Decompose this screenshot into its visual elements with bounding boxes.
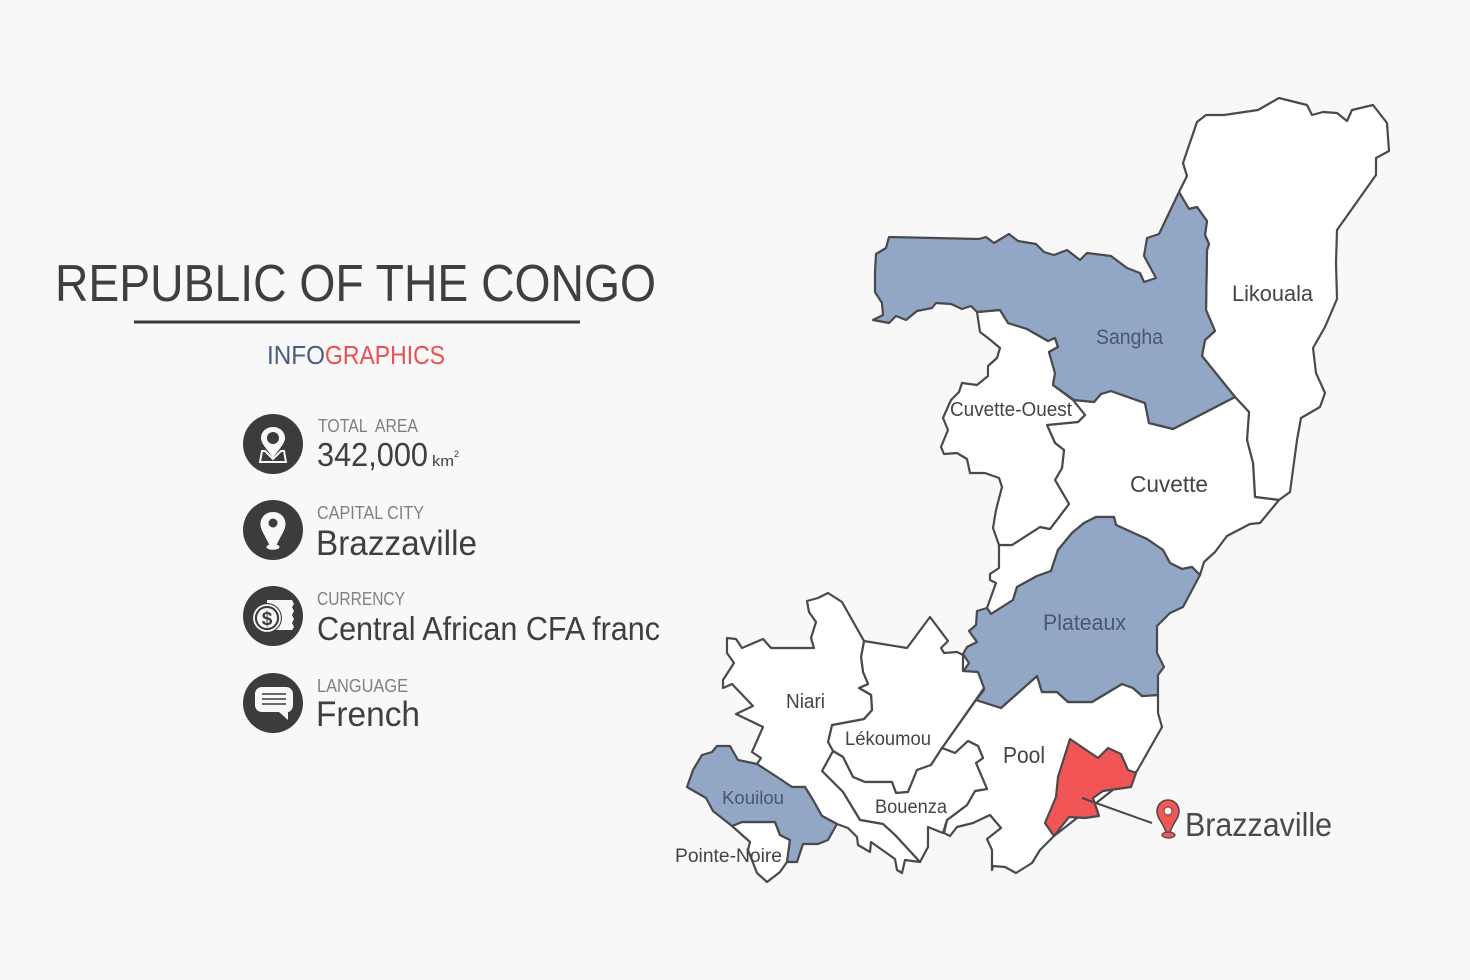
unit: square kilometres: km	[432, 453, 454, 470]
value: language: French	[316, 695, 420, 734]
label: total area: TOTAL AREA	[318, 416, 418, 436]
icon: location pin	[243, 500, 303, 560]
label: currency: CURRENCY	[317, 589, 405, 609]
facts list	[243, 414, 660, 734]
label: Bouenza: Bouenza	[875, 797, 947, 818]
label: Pointe-Noire: Pointe-Noire	[675, 846, 782, 867]
unit: square kilometres: 2	[454, 449, 459, 459]
subtitle: GRAPHICS	[325, 340, 445, 370]
region: Kouilou	[687, 746, 837, 862]
region: Cuvette	[987, 391, 1279, 614]
region: Cuvette-Ouest	[941, 310, 1085, 545]
title block	[55, 255, 656, 370]
label: Likouala: Likouala	[1232, 281, 1314, 306]
map of Republic of the Congo	[675, 98, 1389, 882]
fact: total area	[243, 414, 459, 474]
label: capital city: CAPITAL CITY	[317, 503, 424, 523]
fact: capital city	[243, 500, 477, 563]
label: Cuvette-Ouest: Cuvette-Ouest	[950, 399, 1072, 421]
region: Pool	[942, 676, 1162, 873]
region: Niari	[723, 593, 920, 873]
value: currency: Central African CFA franc	[317, 610, 660, 647]
region: Plateaux	[963, 517, 1200, 708]
label: Sangha: Sangha	[1096, 326, 1163, 349]
region: Brazzaville	[1045, 739, 1136, 836]
fact: language	[243, 673, 420, 734]
label: Kouilou: Kouilou	[722, 788, 784, 808]
region: Bouenza	[822, 741, 987, 862]
callout leader line	[1082, 798, 1152, 823]
label: Plateaux: Plateaux	[1043, 610, 1126, 635]
value: capital city: Brazzaville	[316, 524, 477, 563]
label: Niari: Niari	[786, 691, 825, 713]
label: language: LANGUAGE	[317, 676, 408, 696]
callout label: Brazzaville	[1185, 806, 1332, 843]
icon: coins and banknotes	[243, 586, 303, 646]
subtitle	[267, 340, 445, 370]
region: Likouala	[1179, 98, 1389, 500]
icon: coins and banknotes: $	[262, 609, 273, 630]
label: Pool: Pool	[1003, 742, 1045, 768]
unit: square kilometres	[432, 449, 459, 470]
label: Lékoumou: Lékoumou	[845, 729, 931, 750]
region: Sangha	[873, 192, 1235, 429]
title underline	[134, 320, 580, 324]
label: Cuvette: Cuvette	[1130, 471, 1208, 497]
value: total area: 342,000	[317, 436, 428, 473]
icon: red location pin	[1157, 800, 1179, 838]
subtitle: INFO	[267, 340, 325, 370]
icon: map pin on map	[243, 414, 303, 474]
fact: currency	[243, 586, 660, 647]
title: REPUBLIC OF THE CONGO	[55, 255, 656, 313]
region: Lékoumou	[828, 617, 984, 793]
icon: speech bubble	[243, 673, 303, 733]
region: Pointe-Noire	[732, 822, 790, 882]
callout: Brazzaville	[1082, 798, 1332, 843]
